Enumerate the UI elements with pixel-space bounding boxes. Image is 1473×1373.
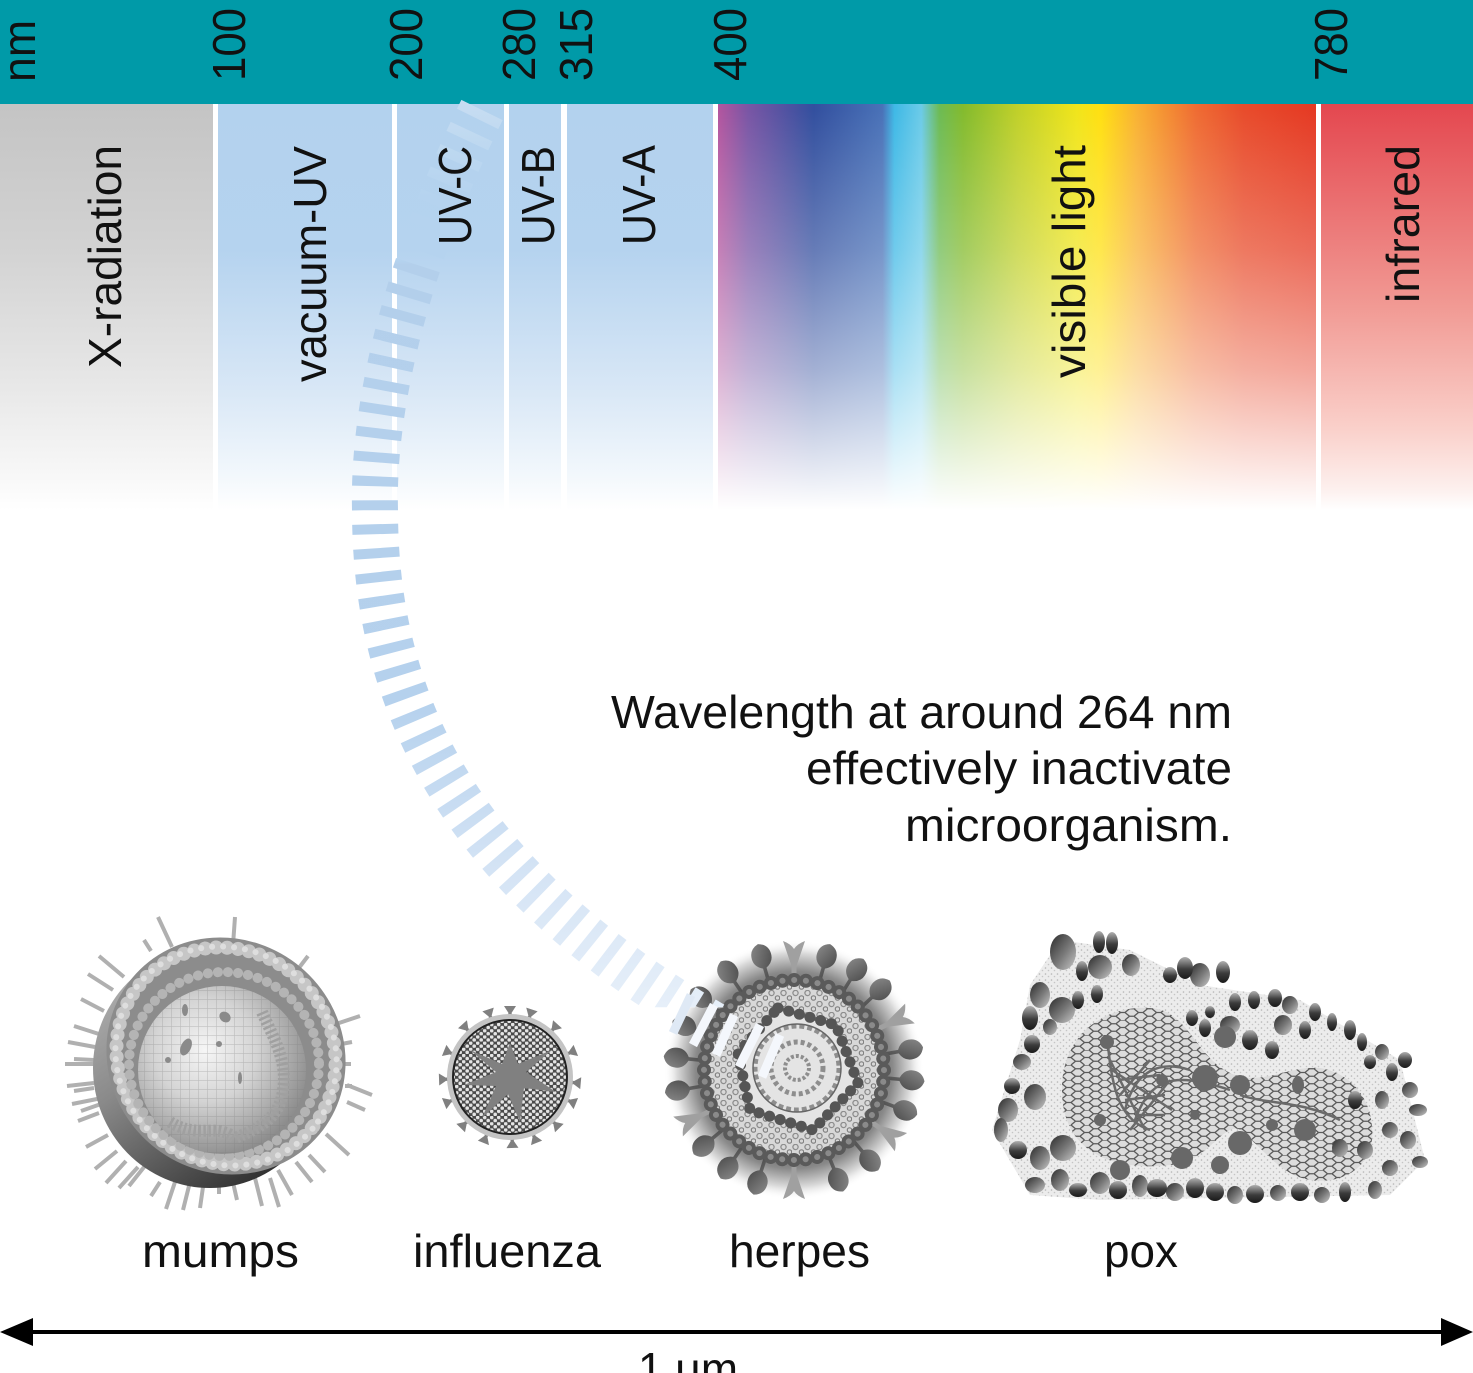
label: mumps: mumps	[142, 1225, 299, 1277]
pox surface particles	[994, 934, 1428, 1204]
label: X-radiation: X-radiation	[79, 145, 131, 368]
label: vacuum-UV: vacuum-UV	[284, 146, 336, 382]
band: infrared	[1321, 104, 1473, 510]
pox core mesh	[1062, 1008, 1372, 1181]
tick 315: 315	[550, 8, 602, 81]
label: infrared: infrared	[1377, 145, 1429, 303]
UV dashes highlight over the herpes virus	[673, 995, 780, 1077]
label: pox: pox	[1104, 1225, 1178, 1277]
pox outer body	[992, 940, 1425, 1200]
mumps outer shell	[93, 948, 327, 1188]
callout: wavelength note: effectively inactivate	[806, 742, 1232, 794]
virus labels	[142, 1225, 1178, 1277]
callout: wavelength note: microorganism.	[905, 799, 1232, 851]
label: herpes: herpes	[729, 1225, 870, 1277]
band: UV-C	[397, 104, 504, 510]
herpes envelope	[704, 980, 884, 1160]
tick 100: 100	[203, 8, 255, 81]
icon: mumps virus	[58, 889, 394, 1223]
herpes capsid hexagon	[738, 1008, 858, 1130]
callout: wavelength note: Wavelength at around 264 nm	[611, 686, 1232, 738]
label: UV-B: UV-B	[512, 146, 564, 245]
herpes DNA coil	[753, 1024, 841, 1112]
band: UV-A	[567, 104, 713, 510]
label: UV-C: UV-C	[429, 146, 481, 245]
label: influenza: influenza	[413, 1225, 601, 1277]
icon: pox virus	[992, 931, 1428, 1204]
mumps bead membrane	[58, 889, 394, 1223]
panel: wavelength scale bar	[0, 0, 1473, 104]
band: vacuum-UV	[218, 104, 392, 510]
pox dark particles	[1004, 931, 1412, 1203]
tick 200: 200	[380, 8, 432, 81]
callout: wavelength note	[611, 686, 1232, 851]
label: visible light: visible light	[1043, 145, 1095, 378]
arrow: one micrometre scale	[0, 1318, 1473, 1346]
tick 400: 400	[704, 8, 756, 81]
band: X-radiation	[0, 104, 213, 510]
icon: herpes virus	[663, 940, 925, 1200]
band labels	[79, 145, 1429, 382]
mumps strand	[170, 1012, 284, 1138]
tick 780: 780	[1305, 8, 1357, 81]
pox DNA strands	[1108, 1045, 1340, 1130]
band: UV-B	[509, 104, 561, 510]
label: UV-A: UV-A	[613, 145, 665, 245]
arc of UV light to the herpes virus	[375, 110, 782, 1062]
band: visible light	[718, 104, 1316, 510]
tick 280: 280	[493, 8, 545, 81]
panel: spectrum bands	[0, 104, 1473, 510]
icon: influenza virus	[439, 1006, 581, 1148]
mumps inner sphere	[138, 986, 306, 1154]
herpes spikes	[663, 941, 925, 1199]
